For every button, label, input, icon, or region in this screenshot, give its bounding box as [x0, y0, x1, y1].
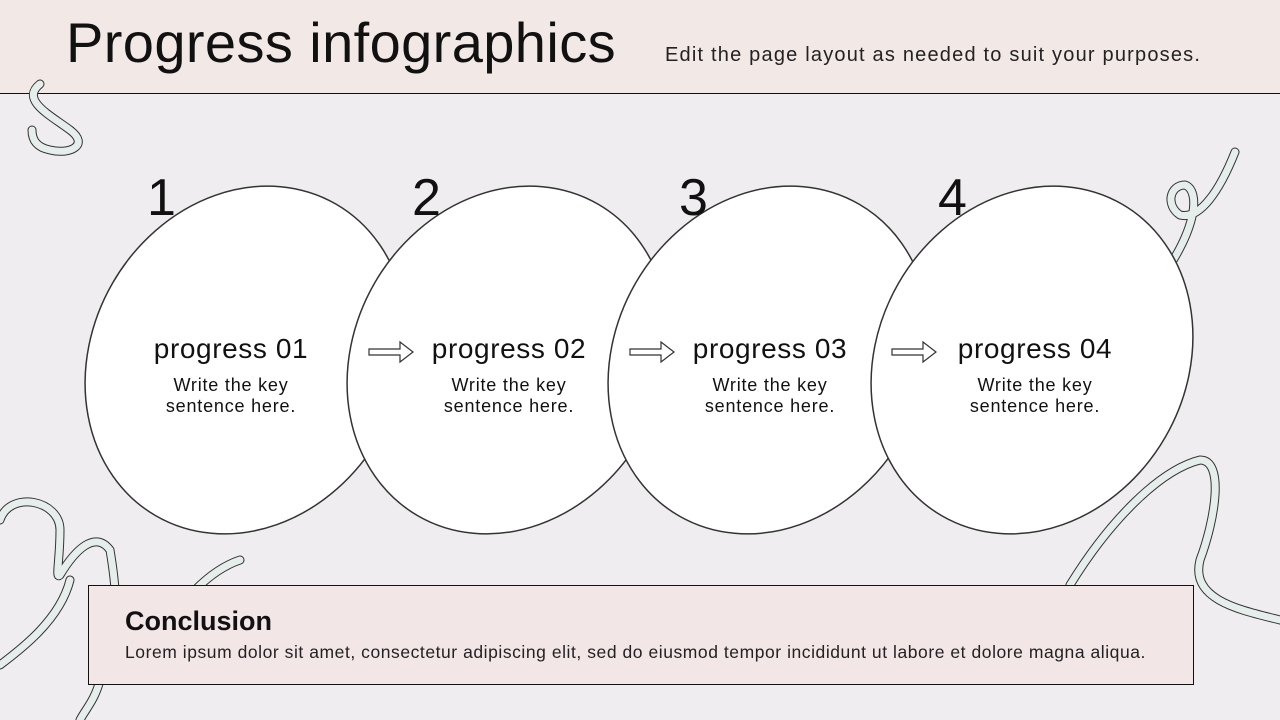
text: 3	[679, 169, 708, 227]
ellipse 3	[546, 127, 992, 593]
step 3 text: Write the key	[712, 375, 828, 395]
step 4 text: progress 04	[958, 333, 1112, 364]
subtitle: Edit the page layout as needed to suit your purposes.	[665, 44, 1201, 66]
conclusion box	[88, 585, 1194, 685]
step 2 text: progress 02	[432, 333, 586, 364]
step 3 text	[693, 333, 847, 416]
step 1 text	[154, 333, 308, 416]
text: 2	[412, 169, 441, 227]
step 3 text: sentence here.	[705, 396, 835, 416]
step 4 text	[958, 333, 1112, 416]
conclusion heading: Conclusion	[125, 606, 272, 636]
title: Progress infographics	[66, 11, 616, 74]
step 1 text: progress 01	[154, 333, 308, 364]
ellipse 2	[285, 127, 731, 593]
text: 4	[938, 169, 967, 227]
step 2 text: sentence here.	[444, 396, 574, 416]
arrow 1	[369, 342, 413, 362]
step 3 text: progress 03	[693, 333, 847, 364]
step 4 text: Write the key	[977, 375, 1093, 395]
step 2 text: Write the key	[451, 375, 567, 395]
ellipse 4	[809, 127, 1255, 593]
step 1 text: sentence here.	[166, 396, 296, 416]
numbers: 1	[147, 169, 176, 227]
header band	[0, 0, 1280, 94]
step 1 text: Write the key	[173, 375, 289, 395]
arrow 3	[892, 342, 936, 362]
ellipse 1	[23, 127, 469, 593]
step 2 text	[432, 333, 586, 416]
step 4 text: sentence here.	[970, 396, 1100, 416]
conclusion text: Lorem ipsum dolor sit amet, consectetur adipiscing elit, sed do eiusmod tempor incididunt ut labore et dolore magna aliqua.	[125, 642, 1146, 662]
arrow 2	[630, 342, 674, 362]
